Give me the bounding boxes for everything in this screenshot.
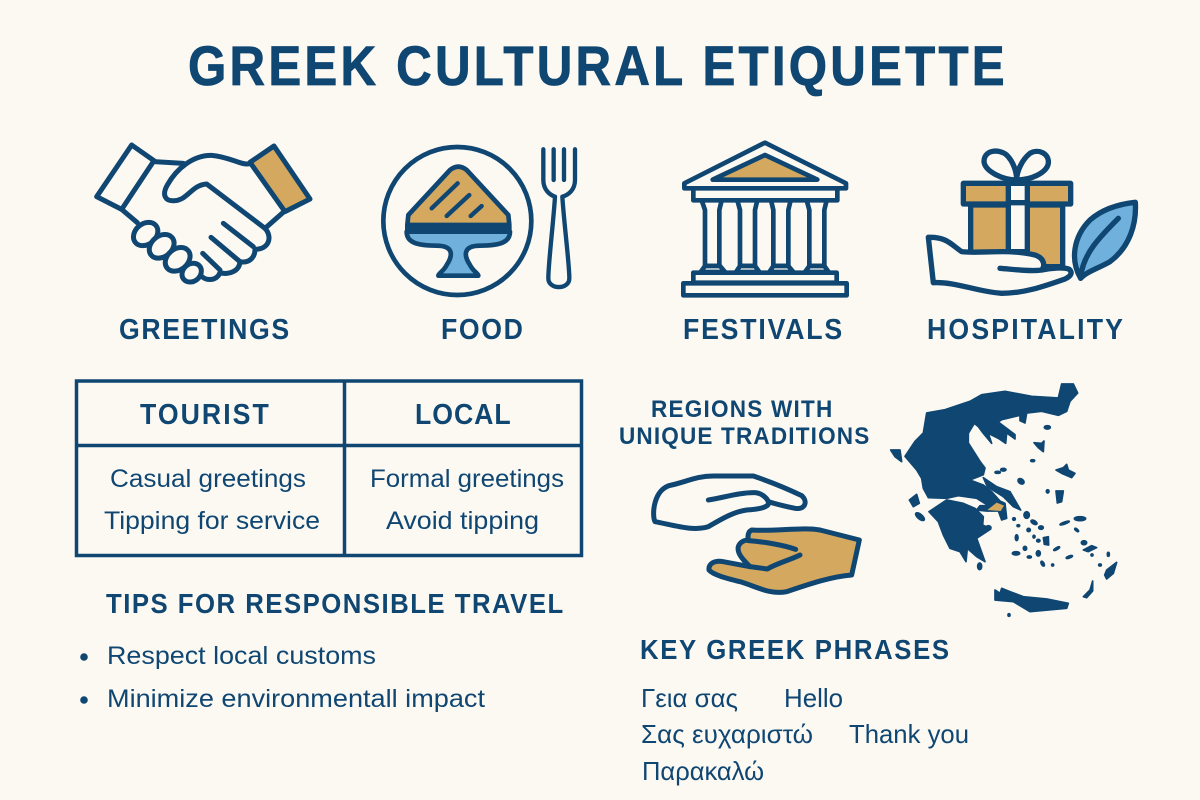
label: festivals: FESTIVALS xyxy=(683,313,842,345)
tip: respect local customs: Respect local customs xyxy=(107,642,376,670)
heading: regions with unique traditions: REGIONS WITH xyxy=(651,395,832,422)
heading: regions with unique traditions: UNIQUE TRADITIONS xyxy=(619,422,869,449)
phrase: thank you in Greek: Σας ευχαριστώ xyxy=(641,719,813,749)
tourist: casual greetings: Casual greetings xyxy=(110,465,306,493)
title: GREEK CULTURAL ETIQUETTE xyxy=(188,35,1005,98)
heading: key Greek phrases: KEY GREEK PHRASES xyxy=(640,634,949,665)
map: Attica highlight xyxy=(987,503,1004,511)
tourist: tipping for service: Tipping for service xyxy=(104,507,320,535)
heading: tips for responsible travel: TIPS FOR RESPONSIBLE TRAVEL xyxy=(106,588,563,619)
comparison table: tourist vs local xyxy=(76,381,582,556)
map: Evia xyxy=(983,478,1021,510)
phrases list xyxy=(641,683,969,786)
map of Greece xyxy=(891,384,1117,616)
map: Crete xyxy=(995,588,1068,612)
tip: minimize environmental impact: Minimize environmentall impact xyxy=(107,685,485,713)
icon: giving and receiving hands xyxy=(654,476,859,592)
heading: regions with unique traditions xyxy=(619,395,869,449)
map: Peloponnese xyxy=(929,500,991,562)
table header: tourist: TOURIST xyxy=(140,398,269,430)
translation: thank you: Thank you xyxy=(849,719,969,749)
category labels xyxy=(119,313,1123,345)
icon: gift on hand with leaf xyxy=(928,151,1135,293)
map: mainland xyxy=(905,384,1078,520)
local: avoid tipping: Avoid tipping xyxy=(386,507,539,535)
icon: handshake xyxy=(97,145,310,286)
map: islands xyxy=(891,426,1117,616)
table header: local: LOCAL xyxy=(415,398,511,430)
tips list xyxy=(80,642,485,713)
label: hospitality: HOSPITALITY xyxy=(927,313,1123,345)
translation: hello: Hello xyxy=(784,683,843,713)
local: formal greetings: Formal greetings xyxy=(370,465,564,493)
phrase: hello in Greek: Γεια σας xyxy=(641,683,738,713)
icon: food plate and fork xyxy=(383,147,575,295)
label: greetings: GREETINGS xyxy=(119,313,289,345)
icon: temple xyxy=(683,143,847,295)
label: food: FOOD xyxy=(441,313,523,345)
phrase: please in Greek: Παρακαλώ xyxy=(642,756,764,786)
